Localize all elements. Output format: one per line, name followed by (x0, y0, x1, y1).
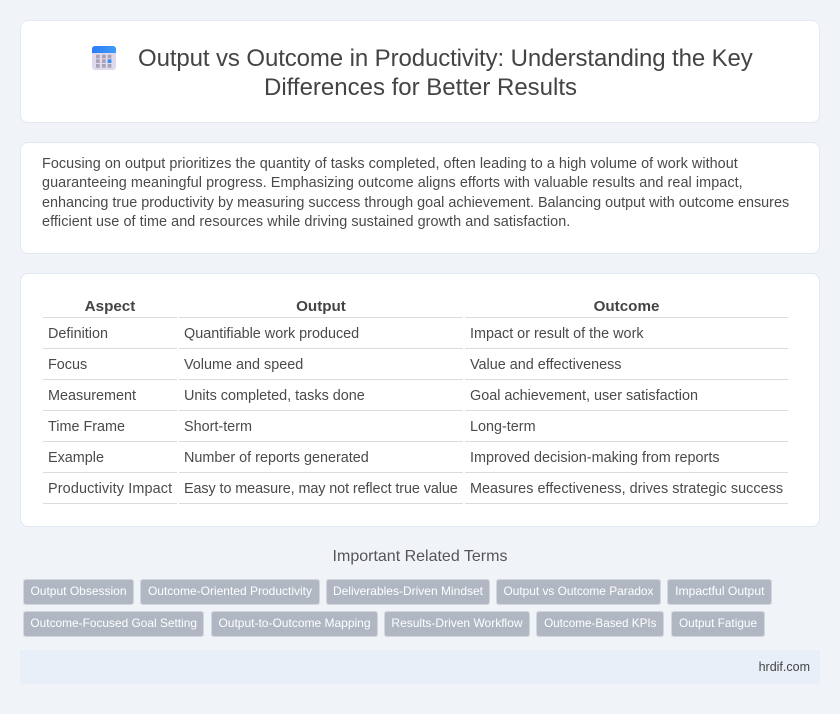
row: example: Improved decision-making from reports (470, 450, 720, 466)
row: productivity impact: Measures effectiveness, drives strategic success (470, 481, 783, 497)
tags: related terms: Output Obsession (30, 584, 127, 598)
panel: title card (20, 20, 820, 123)
tags: related terms: Outcome-Oriented Productivity (148, 584, 312, 598)
row: measurement: Measurement (48, 388, 136, 404)
panel: comparison table (20, 273, 820, 527)
row: productivity impact (48, 481, 783, 497)
tags: related terms: Output Fatigue (679, 616, 757, 630)
title: Differences for Better Results (264, 74, 577, 101)
tags: related terms: Output vs Outcome Paradox (503, 584, 654, 598)
tags: related terms: Impactful Output (675, 584, 764, 598)
row: measurement: Units completed, tasks done (184, 388, 365, 404)
intro text: Focusing on output prioritizes the quantity of tasks completed, often leading to a high volume of work without (42, 156, 738, 172)
row: productivity impact: Productivity Impact (48, 481, 172, 497)
row: example (48, 450, 720, 466)
tags: related terms (23, 579, 772, 637)
table header row: Aspect (85, 298, 135, 315)
tags: related terms: Results-Driven Workflow (391, 616, 523, 630)
row: time frame: Long-term (470, 419, 536, 435)
row: time frame: Time Frame (48, 419, 125, 435)
footer source text: hrdif.com (759, 660, 810, 674)
row: time frame (48, 419, 536, 435)
row: example: Number of reports generated (184, 450, 369, 466)
row: time frame: Short-term (184, 419, 252, 435)
row: focus: Focus (48, 357, 87, 373)
comparison table (43, 298, 788, 504)
panel: intro paragraph (20, 142, 820, 254)
row: definition: Definition (48, 326, 108, 342)
intro text: efficient use of time and resources while driving sustained growth and satisfaction. (42, 214, 570, 230)
heading: related terms: Important Related Terms (333, 548, 507, 565)
table header row: Outcome (594, 298, 659, 315)
row: definition (48, 326, 644, 342)
tags: related terms: Output-to-Outcome Mapping (218, 616, 371, 630)
table header row (85, 298, 659, 315)
intro text: guaranteeing meaningful progress. Emphasizing outcome aligns efforts with valuable results and real impact, (42, 175, 743, 191)
row: focus: Value and effectiveness (470, 357, 621, 373)
row: definition: Impact or result of the work (470, 326, 644, 342)
row: focus: Volume and speed (184, 357, 303, 373)
row: productivity impact: Easy to measure, may not reflect true value (184, 481, 458, 497)
row: definition: Quantifiable work produced (184, 326, 359, 342)
row: measurement (48, 388, 698, 404)
row: focus (48, 357, 621, 373)
intro text: enhancing true productivity by measuring success through goal achievement. Balancing output with outcome ensures (42, 195, 789, 211)
tags: related terms: Outcome-Based KPIs (544, 617, 656, 630)
tags: related terms: Deliverables-Driven Mindset (333, 584, 483, 598)
title (138, 45, 753, 101)
icon: calendar (92, 46, 116, 70)
row: example: Example (48, 450, 104, 466)
intro text (42, 156, 789, 230)
row: measurement: Goal achievement, user satisfaction (470, 388, 698, 404)
tags: related terms: Outcome-Focused Goal Setting (30, 616, 197, 630)
table header row: Output (296, 298, 346, 315)
footer bar (20, 650, 820, 684)
title: Output vs Outcome in Productivity: Understanding the Key (138, 45, 753, 72)
